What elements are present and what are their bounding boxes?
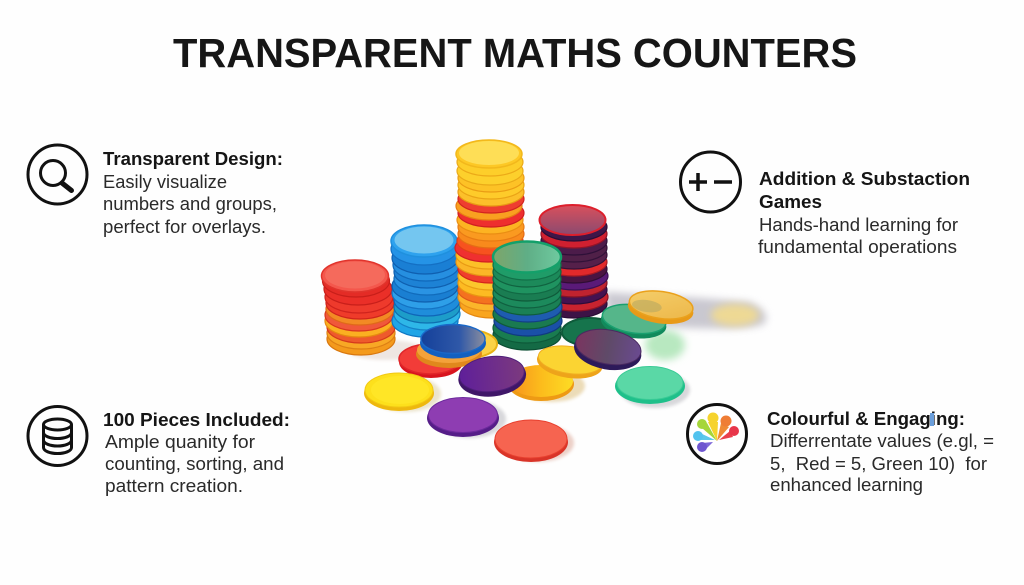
text: addition and subtraction games: Hands-hand learning for [759, 215, 958, 235]
text: transparent design [103, 148, 283, 237]
icon: colour fan [688, 404, 746, 464]
loose counter: light green [615, 366, 685, 404]
loose counter: gold [626, 287, 696, 328]
text: addition and subtraction games: Games [759, 191, 822, 212]
icon: stacked database [28, 406, 87, 466]
text: 100 pieces included: counting, sorting, and [105, 454, 284, 474]
stack: yellow orange red [455, 140, 524, 318]
cast shadows [347, 292, 766, 462]
text: addition and subtraction games [758, 168, 970, 257]
loose counter: red [494, 420, 568, 462]
text: colourful and engaging: enhanced learning [770, 475, 923, 495]
text: 100 pieces included: 100 Pieces Included: [103, 409, 290, 430]
title: TRANSPARENT MATHS COUNTERS [173, 30, 857, 76]
text: transparent design: perfect for overlays. [103, 217, 266, 237]
text: addition and subtraction games: Addition & Substaction [759, 168, 970, 189]
loose counter: purple [427, 398, 499, 437]
text: addition and subtraction games: fundamental operations [758, 237, 957, 257]
loose counter: amber [508, 365, 574, 401]
text: transparent design: Transparent Design: [103, 148, 283, 169]
text: colourful and engaging: Differrentate values (e.gl, = [770, 431, 994, 451]
panel: colourful and engaging [688, 404, 994, 495]
stack: red and orange [322, 260, 395, 355]
stack: green and blue [493, 242, 562, 350]
loose counter: yellow [364, 373, 434, 411]
illustration: counters [322, 140, 766, 462]
text: transparent design: numbers and groups, [103, 194, 277, 214]
icon: magnifying glass [28, 145, 87, 204]
panel: addition and subtraction games [680, 152, 970, 257]
text: transparent design: Easily visualize [103, 172, 227, 192]
loose counter: red in pile [399, 344, 463, 378]
loose counter: yellow behind pile [439, 330, 497, 358]
text: 100 pieces included: Ample quanity for [105, 432, 255, 452]
loose counter: dark green [562, 318, 618, 346]
text: 100 pieces included: pattern creation. [105, 476, 243, 496]
loose counter: orange in pile [416, 337, 482, 368]
text: 100 pieces included [103, 409, 290, 496]
loose counter: dark purple right [571, 324, 645, 375]
loose counter: dark blue [420, 324, 486, 358]
loose counter: yellow orange [535, 342, 605, 382]
text: colourful and engaging [767, 408, 994, 495]
text: colourful and engaging: Colourful & Engaging: [767, 408, 965, 429]
loose counter: green [599, 301, 669, 342]
stack: blue [391, 225, 460, 337]
stack: dark red and purple [540, 205, 608, 318]
panel: transparent design [28, 145, 283, 237]
loose counter: purple in pile [456, 353, 528, 400]
icon: plus and minus [680, 152, 740, 212]
panel: 100 pieces included [28, 406, 290, 496]
text: colourful and engaging: 5, Red = 5, Green 10) for [770, 454, 987, 474]
